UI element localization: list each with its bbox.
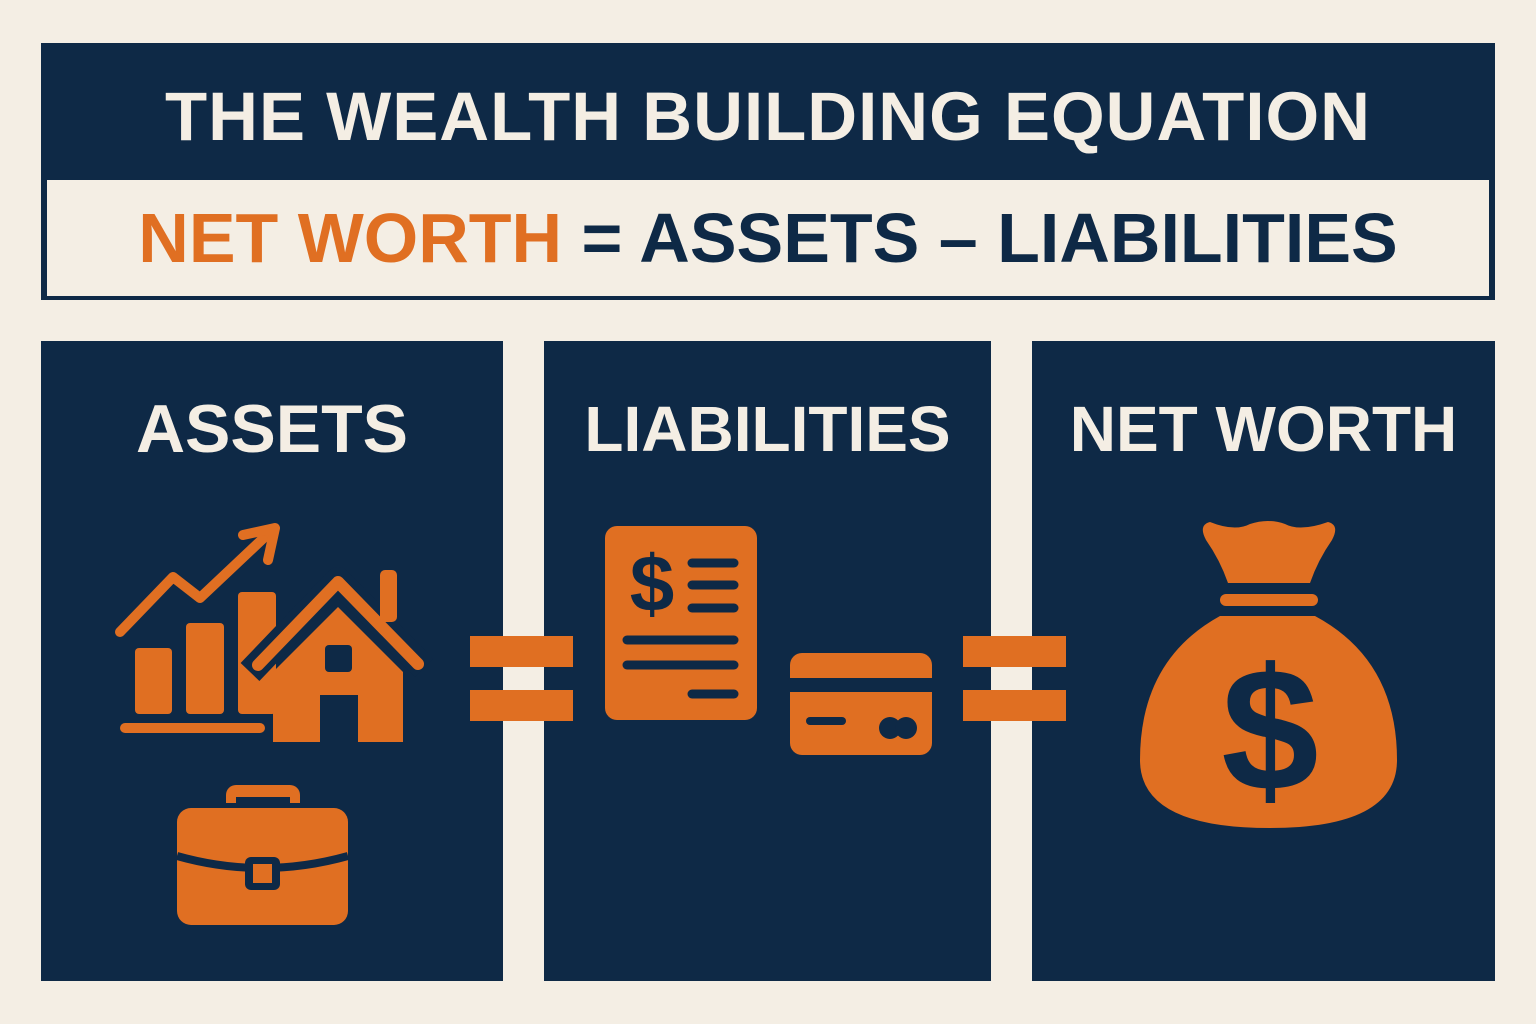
header box xyxy=(41,43,1495,300)
icon: credit card xyxy=(790,653,932,755)
icon: money bag xyxy=(1140,521,1397,828)
panel: assets xyxy=(41,341,503,981)
heading: net worth: NET WORTH xyxy=(1070,393,1457,465)
icon: money bag: $ xyxy=(1221,633,1319,828)
equation box xyxy=(47,180,1489,296)
icon: house xyxy=(250,570,424,742)
heading: assets: ASSETS xyxy=(136,391,408,467)
icon: bill document: $ xyxy=(630,539,674,628)
panel: liabilities xyxy=(544,341,991,981)
title: THE WEALTH BUILDING EQUATION xyxy=(165,78,1371,155)
heading: liabilities: LIABILITIES xyxy=(584,393,951,465)
icon: briefcase xyxy=(177,785,348,925)
icon: equals 1 xyxy=(470,636,573,721)
icon: equals 2 xyxy=(963,636,1066,721)
icon: bill document xyxy=(605,526,757,720)
panel: net worth xyxy=(1032,341,1495,981)
icon: growth chart xyxy=(120,528,276,733)
equation box: NET WORTH = ASSETS – LIABILITIES xyxy=(138,199,1398,277)
